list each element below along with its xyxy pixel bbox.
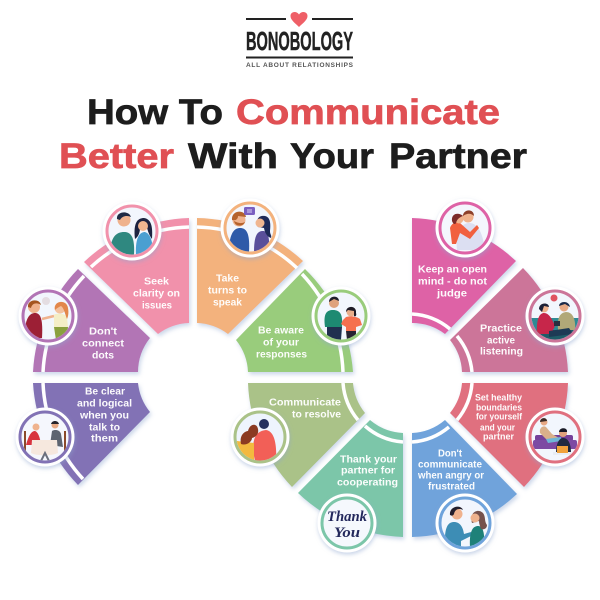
panel: be aware of your responses [236, 269, 353, 372]
panel: don't connect dots [33, 269, 150, 372]
icon: couple dining, be clear [16, 408, 74, 466]
panel: keep an open mind: Keep an open [418, 264, 487, 276]
icon: hugging couple, keep an open mind [436, 198, 494, 258]
icon: couple on sofa with laptop, set boundaries [526, 408, 584, 466]
title: Partner [389, 137, 527, 176]
panel: seek clarity on issues [84, 218, 189, 334]
panel: take turns to speak: Take [216, 272, 239, 284]
panel: don't communicate when angry [412, 420, 517, 537]
panel: take turns to speak: turns to [208, 284, 247, 296]
panel: seek clarity on issues: issues [142, 300, 172, 312]
panel: don't connect dots: dots [92, 350, 114, 362]
panel: be clear and logical: Be clear [85, 386, 125, 398]
panel: thank your partner [298, 420, 403, 537]
panel: don't communicate when angry: frustrated [428, 480, 475, 492]
panel: be clear and logical: talk to [89, 422, 120, 434]
icon: thank you lettering: You [334, 525, 360, 541]
panel: be clear and logical: them [91, 432, 118, 444]
panel: don't communicate when angry: Don't [438, 448, 462, 460]
panel: don't connect dots: Don't [89, 326, 118, 338]
panel: be aware of your responses: Be aware [258, 324, 304, 336]
icon: facing couple, don't communicate when angry [436, 494, 494, 552]
title: How To [87, 93, 223, 132]
panel: set healthy boundaries [450, 383, 568, 487]
icon: couple standing, be aware [312, 286, 370, 346]
panel: practice active listening: listening [480, 346, 523, 358]
panel: be clear and logical: when you [79, 410, 129, 422]
logo: Bonobology: ALL ABOUT RELATIONSHIPS [246, 62, 354, 69]
panel: be aware of your responses: responses [256, 348, 307, 360]
panel: seek clarity on issues: clarity on [133, 288, 180, 300]
title: Your [290, 137, 374, 176]
icon: couple on sofa, practice active listening [526, 286, 584, 346]
panel: take turns to speak [197, 218, 303, 334]
panel: practice active listening: active [487, 334, 515, 346]
panel: practice active listening: Practice [480, 322, 522, 334]
panel: practice active listening [450, 268, 568, 372]
icon: arguing couple, don't connect dots [18, 286, 78, 346]
icon: thank you lettering: Thank [327, 509, 367, 525]
panel: seek clarity on issues: Seek [144, 276, 169, 288]
panel: be clear and logical [33, 383, 150, 485]
panel: be aware of your responses: of your [263, 336, 299, 348]
panel: set healthy boundaries: boundaries [476, 402, 522, 414]
panel: thank your partner: Thank your [340, 454, 397, 466]
panel: set healthy boundaries: and your [480, 422, 515, 434]
panel: don't connect dots: connect [82, 338, 125, 350]
panel: don't communicate when angry: communicate [418, 458, 482, 470]
icon: couple talking, seek clarity [102, 202, 162, 260]
panel: set healthy boundaries: Set healthy [475, 392, 523, 404]
title [59, 93, 527, 176]
panel: set healthy boundaries: for yourself [476, 412, 523, 422]
panel: keep an open mind [412, 218, 516, 334]
panel: thank your partner: partner for [341, 464, 395, 476]
panel: be clear and logical: and logical [77, 398, 132, 410]
panel: keep an open mind: mind - do not [418, 276, 488, 288]
panel: communicate to resolve: to resolve [292, 408, 341, 420]
panel: don't communicate when angry: when angry or [417, 470, 484, 482]
panel: thank your partner: cooperating [337, 476, 398, 488]
title: With [188, 137, 278, 176]
icon: couple taking turns [220, 198, 280, 258]
title: Communicate [236, 93, 500, 132]
panel: keep an open mind: judge [436, 288, 467, 300]
panel: take turns to speak: speak [213, 296, 242, 308]
panel: set healthy boundaries: partner [483, 432, 514, 442]
icon: thank you lettering [318, 494, 376, 552]
icon: embracing couple, communicate to resolve [230, 408, 290, 466]
panel: communicate to resolve: Communicate [269, 396, 341, 408]
logo: Bonobology: BONOBOLOGY [246, 26, 353, 56]
logo: Bonobology [246, 12, 354, 69]
panel: communicate to resolve [248, 383, 365, 487]
title: Better [59, 137, 174, 176]
